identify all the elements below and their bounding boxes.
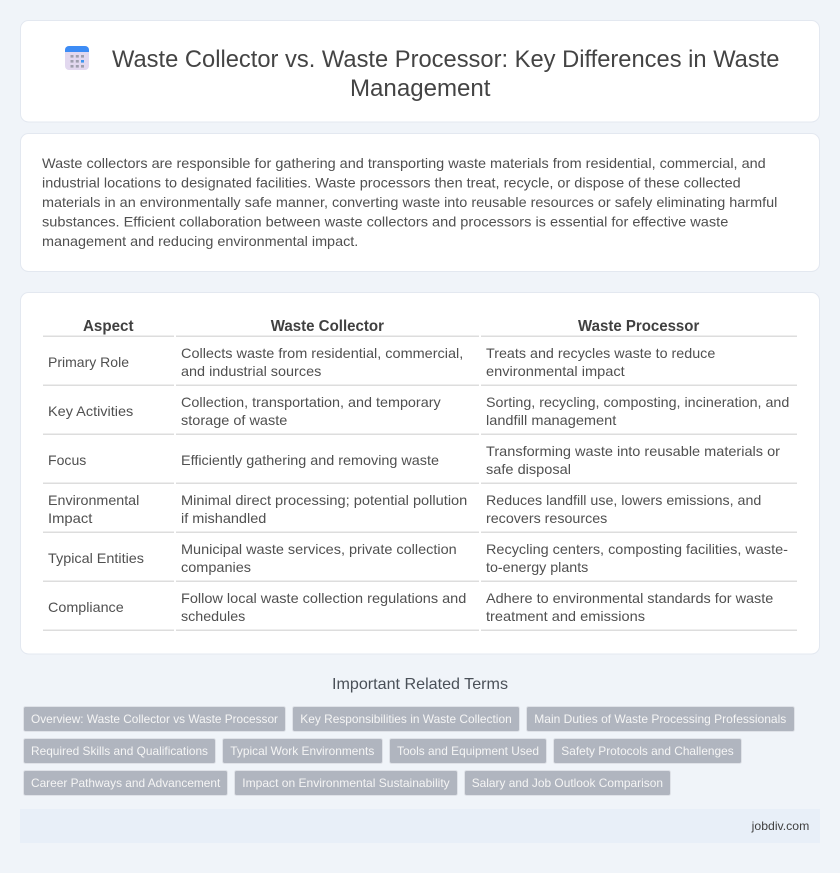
row: primary role: environmental impact (486, 363, 625, 379)
row: compliance: schedules (181, 608, 245, 624)
row: key activities: storage of waste (181, 412, 288, 428)
row: primary role: Primary Role (48, 354, 129, 370)
row: focus: Transforming waste into reusable materials or (486, 443, 780, 459)
row: key activities: Sorting, recycling, composting, incineration, and (486, 394, 789, 410)
row: environmental impact: Impact (48, 510, 92, 526)
table header (43, 318, 797, 336)
tag: Career Pathways and Advancement (31, 776, 221, 790)
row: typical entities: Typical Entities (48, 550, 144, 566)
panel: comparison table (20, 292, 820, 654)
icon: calendar (65, 46, 89, 70)
tag: Tools and Equipment Used (397, 744, 539, 758)
panel: summary (20, 134, 820, 272)
tag: Safety Protocols and Challenges (561, 744, 734, 758)
tag (234, 770, 458, 796)
footer: jobdiv.com (751, 819, 809, 833)
row: compliance: Adhere to environmental standards for waste (486, 590, 774, 606)
row: primary role (43, 345, 797, 385)
row: compliance: Compliance (48, 599, 124, 615)
row: key activities: Collection, transportation, and temporary (181, 394, 441, 410)
row: key activities: Key Activities (48, 403, 133, 419)
summary text: Waste collectors are responsible for gathering and transporting waste materials from residential, commercial, and (42, 155, 766, 171)
tag (24, 770, 228, 796)
tag: Typical Work Environments (230, 744, 374, 758)
row: focus (43, 443, 797, 483)
tag: Key Responsibilities in Waste Collection (300, 712, 512, 726)
row: compliance: Follow local waste collection regulations and (181, 590, 466, 606)
tag (554, 738, 742, 764)
row: typical entities (43, 541, 797, 581)
row: compliance (43, 590, 797, 630)
row: typical entities: to-energy plants (486, 559, 588, 575)
tag: Impact on Environmental Sustainability (242, 776, 450, 790)
row: environmental impact: Environmental (48, 492, 139, 508)
row: typical entities: companies (181, 559, 251, 575)
table header: Aspect (83, 318, 134, 335)
summary text: materials in an environmentally safe manner, converting waste into reusable resources or safely eliminating harmful (42, 194, 777, 210)
heading: important related terms: Important Related Terms (332, 676, 508, 693)
summary text (42, 155, 777, 249)
row: primary role: Treats and recycles waste to reduce (486, 345, 716, 361)
title (112, 46, 780, 102)
tag: Overview: Waste Collector vs Waste Processor (31, 712, 278, 726)
row: environmental impact (43, 492, 797, 532)
row: environmental impact: Minimal direct processing; potential pollution (181, 492, 467, 508)
summary text: management and reducing environmental impact. (42, 233, 358, 249)
row: focus: Focus (48, 452, 86, 468)
title: Waste Collector vs. Waste Processor: Key Differences in Waste (112, 46, 780, 73)
table header: Waste Processor (578, 318, 699, 335)
related term tags (24, 706, 794, 796)
tag (526, 706, 794, 732)
row: primary role: Collects waste from residential, commercial, (181, 345, 463, 361)
title: Management (350, 75, 491, 102)
row: environmental impact: if mishandled (181, 510, 266, 526)
tag (222, 738, 382, 764)
summary text: substances. Efficient collaboration between waste collectors and processors is essential for effective waste (42, 214, 729, 230)
row: focus: Efficiently gathering and removing waste (181, 452, 439, 468)
row: focus: safe disposal (486, 461, 571, 477)
tag: Salary and Job Outlook Comparison (472, 776, 663, 790)
tag: Required Skills and Qualifications (31, 744, 208, 758)
row: environmental impact: Reduces landfill use, lowers emissions, and (486, 492, 761, 508)
summary text: industrial locations to designated facilities. Waste processors then treat, recycle, or dispose of these collected (42, 174, 741, 190)
row: typical entities: Municipal waste services, private collection (181, 541, 457, 557)
row: key activities (43, 394, 797, 434)
panel: header (20, 20, 820, 122)
tag (292, 706, 520, 732)
tag (24, 738, 216, 764)
row: primary role: and industrial sources (181, 363, 321, 379)
table header: Waste Collector (271, 318, 384, 335)
tag: Main Duties of Waste Processing Professionals (534, 712, 786, 726)
tag (464, 770, 670, 796)
tag (24, 706, 286, 732)
row: typical entities: Recycling centers, composting facilities, waste- (486, 541, 788, 557)
footer (20, 809, 820, 843)
row: key activities: landfill management (486, 412, 616, 428)
row: compliance: treatment and emissions (486, 608, 645, 624)
tag (390, 738, 546, 764)
row: environmental impact: recovers resources (486, 510, 607, 526)
